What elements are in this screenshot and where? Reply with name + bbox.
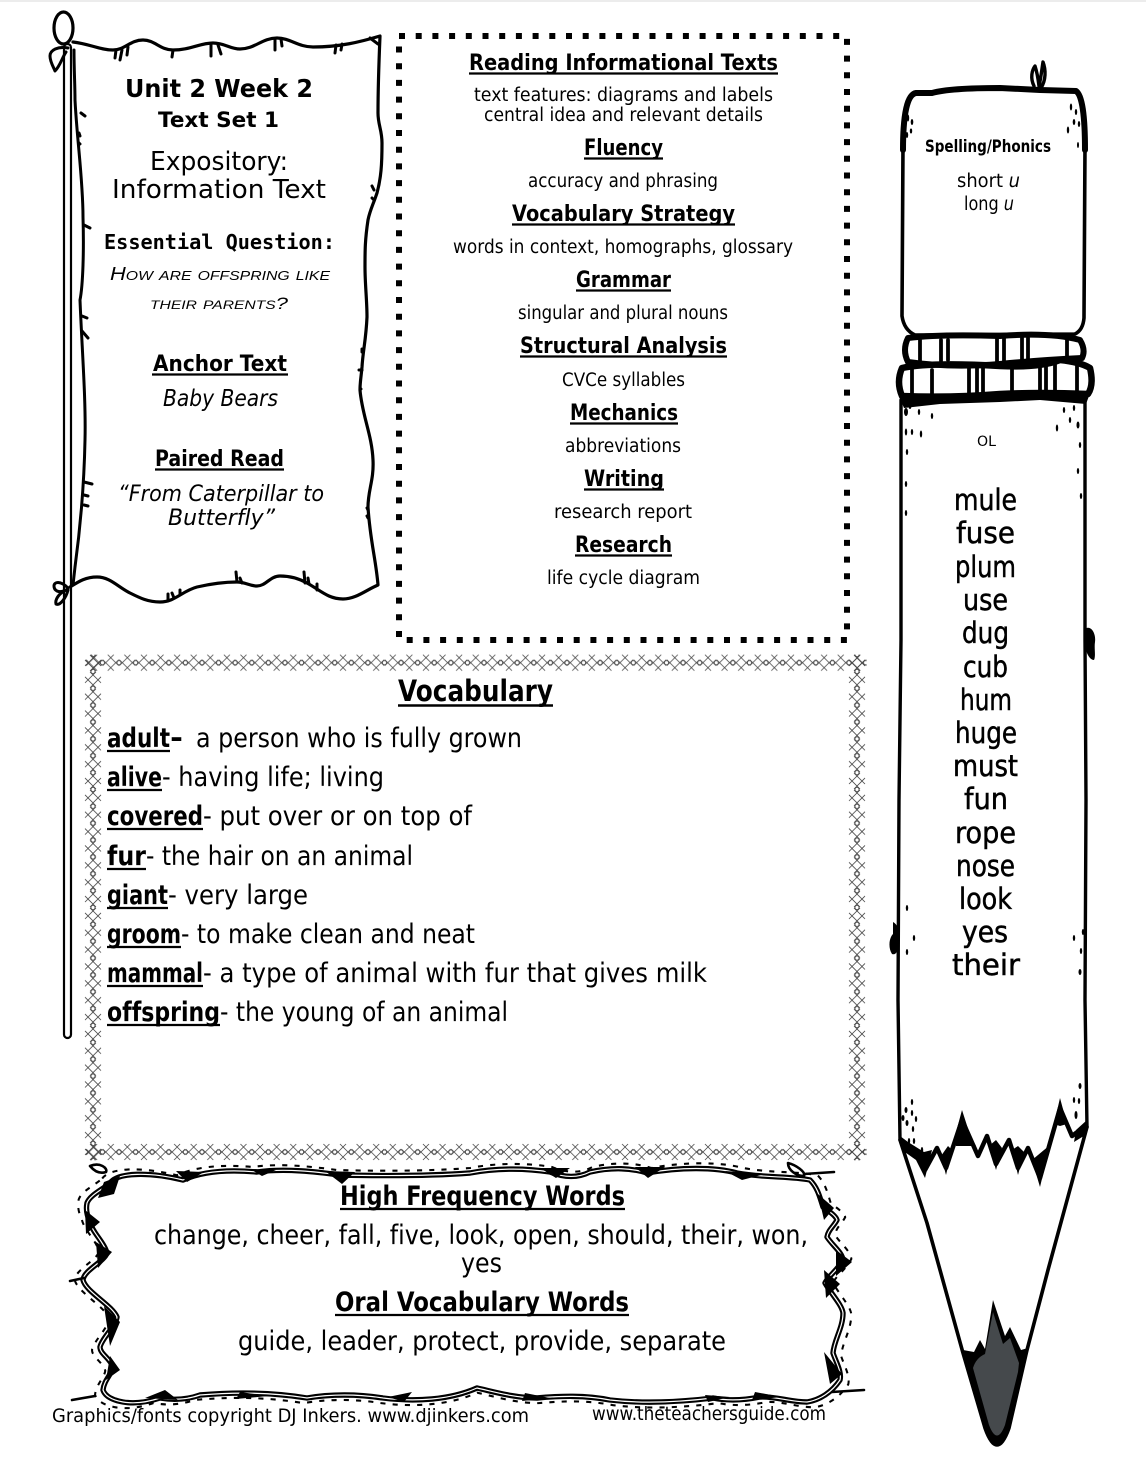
- definition: adult: -: [170, 723, 183, 754]
- essential question: [110, 264, 330, 313]
- essential question: their parents?: [150, 294, 289, 313]
- panel: pencil with spelling words: [889, 62, 1095, 1446]
- structural analysis details: CVCe syllables: [562, 370, 685, 391]
- panel: reading skills with dotted border: [399, 36, 847, 640]
- icon: flag pole with ring and bows: [50, 12, 73, 1038]
- spelling word list: look: [959, 882, 1012, 916]
- spelling heading: Spelling/Phonics: [925, 137, 1051, 156]
- fluency details: accuracy and phrasing: [528, 171, 718, 192]
- spelling word list: fuse: [956, 516, 1015, 550]
- genre: Information Text: [112, 175, 326, 205]
- genre: Expository:: [150, 147, 288, 177]
- text features details: text features: diagrams and labels: [474, 85, 773, 106]
- definition: covered: - put over or on top of: [203, 801, 473, 832]
- heading: reading informational texts: Reading Informational Texts: [469, 51, 778, 76]
- essential question: How are offspring like: [110, 264, 330, 284]
- definition: giant: [107, 880, 308, 911]
- anchor text title: Baby Bears: [163, 386, 278, 412]
- grammar details: singular and plural nouns: [518, 303, 728, 324]
- spelling word list: use: [963, 583, 1008, 617]
- text features details: central idea and relevant details: [484, 105, 763, 126]
- heading: vocabulary strategy: Vocabulary Strategy: [512, 202, 735, 227]
- spelling word list: fun: [964, 782, 1008, 816]
- mechanics details: abbreviations: [565, 436, 681, 457]
- subtitle: Text Set 1: [158, 108, 279, 132]
- footer: website: www.theteachersguide.com: [592, 1403, 826, 1425]
- phonics skills: short u: [957, 171, 1020, 192]
- paired read heading: Paired Read: [155, 447, 284, 472]
- paired read title: [118, 482, 324, 531]
- spelling word list: hum: [960, 683, 1012, 717]
- definition: fur: - the hair on an animal: [146, 841, 413, 872]
- flag outline: [70, 36, 382, 602]
- heading: grammar: Grammar: [576, 268, 671, 293]
- level label: OL: [977, 434, 996, 450]
- definition: giant: - very large: [168, 880, 308, 911]
- definition: groom: - to make clean and neat: [181, 919, 475, 950]
- footer: graphics copyright: Graphics/fonts copyright DJ Inkers. www.djinkers.com: [52, 1405, 529, 1427]
- definition: offspring: - the young of an animal: [220, 997, 508, 1028]
- pencil cone: [900, 1127, 1087, 1445]
- pencil ferrule: [899, 335, 1092, 408]
- definition: mammal: - a type of animal with fur that gives milk: [203, 958, 708, 989]
- heading: high frequency words: High Frequency Words: [340, 1181, 625, 1212]
- spelling word list: must: [953, 749, 1018, 783]
- pencil lead: [963, 1300, 1028, 1446]
- spelling word list: dug: [962, 616, 1009, 650]
- definition: giant: giant: [107, 880, 168, 911]
- definition: offspring: [107, 997, 508, 1028]
- definition: offspring: offspring: [107, 997, 220, 1028]
- text features details: [474, 85, 773, 126]
- high frequency word list: yes: [461, 1248, 502, 1279]
- spelling word list: mule: [954, 483, 1017, 517]
- phonics skills: [957, 171, 1020, 215]
- pencil sharpened edge: [900, 1098, 1087, 1187]
- definition: fur: fur: [107, 841, 146, 872]
- heading: mechanics: Mechanics: [570, 401, 678, 426]
- spelling word list: yes: [962, 915, 1008, 949]
- spelling word list: rope: [955, 816, 1016, 850]
- high frequency word list: [154, 1220, 808, 1279]
- essential question heading: Essential Question:: [104, 230, 335, 254]
- panel: high frequency and oral vocabulary words: [70, 1163, 864, 1408]
- high frequency word list: change, cheer, fall, five, look, open, should, their, won,: [154, 1220, 808, 1251]
- icon: pencil drawing: [889, 62, 1095, 1446]
- definition: adult: adult: [107, 723, 170, 754]
- definition: alive: alive: [107, 762, 162, 793]
- spelling word list: [952, 483, 1021, 982]
- oral vocabulary word list: guide, leader, protect, provide, separate: [238, 1326, 726, 1357]
- research details: life cycle diagram: [547, 568, 700, 589]
- spelling word list: nose: [956, 849, 1015, 883]
- spelling word list: plum: [955, 550, 1016, 584]
- heading: fluency: Fluency: [584, 136, 663, 161]
- paired read title: “From Caterpillar to: [118, 482, 324, 507]
- panel: flag with unit information: [50, 12, 382, 1038]
- heading: structural analysis: Structural Analysis: [520, 334, 727, 359]
- genre: [112, 147, 326, 205]
- definition: adult: a person who is fully grown: [196, 723, 522, 754]
- heading: writing: Writing: [584, 467, 664, 492]
- phonics skills: long u: [964, 194, 1014, 215]
- heading: research: Research: [575, 533, 672, 558]
- spelling word list: their: [952, 948, 1021, 982]
- vocabulary strategy details: words in context, homographs, glossary: [453, 237, 793, 258]
- pencil eraser: [902, 62, 1085, 335]
- paired read title: Butterfly”: [168, 506, 276, 531]
- definition: covered: covered: [107, 801, 203, 832]
- spelling word list: cub: [963, 650, 1008, 684]
- title: Unit 2 Week 2: [125, 74, 313, 103]
- heading: oral vocabulary words: Oral Vocabulary Words: [335, 1287, 629, 1318]
- definition: mammal: mammal: [107, 958, 203, 989]
- definition: alive: - having life; living: [162, 762, 384, 793]
- definition: covered: [107, 801, 473, 832]
- writing details: research report: [554, 502, 692, 523]
- vocabulary heading: Vocabulary: [398, 674, 553, 708]
- spelling word list: huge: [955, 716, 1017, 750]
- definition: groom: groom: [107, 919, 181, 950]
- anchor text heading: Anchor Text: [153, 352, 287, 377]
- panel: vocabulary with cross-stitch border: [81, 651, 869, 1164]
- scalloped frame: [70, 1163, 864, 1408]
- pencil body: [889, 400, 1095, 1153]
